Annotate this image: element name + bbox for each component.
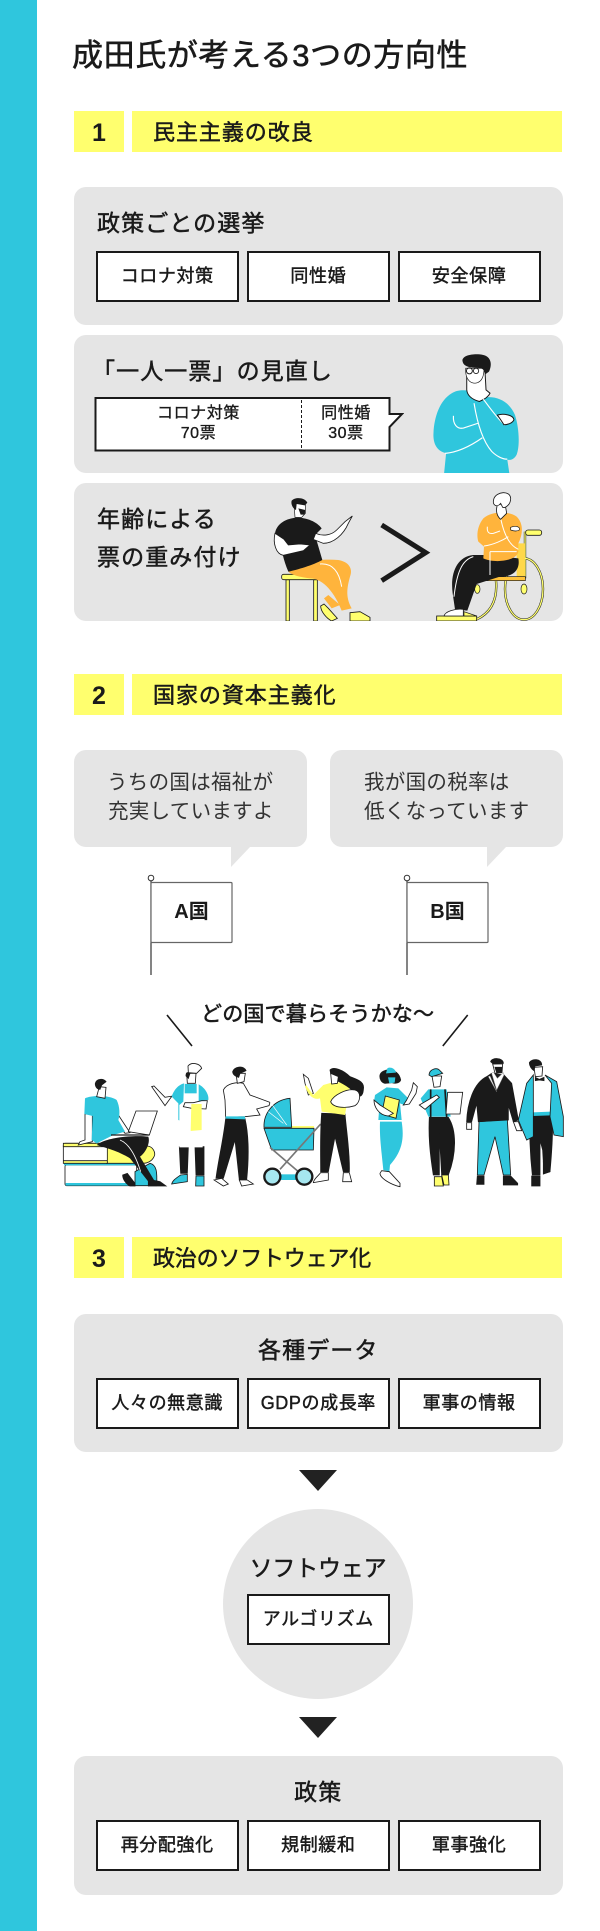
- chip: unconscious of people: [96, 1378, 239, 1429]
- corona votes: [157, 404, 240, 442]
- chip: algorithm: アルゴリズム: [263, 1609, 374, 1629]
- chip: corona: コロナ対策: [121, 266, 214, 286]
- left cyan band: [0, 0, 37, 1931]
- section title 2: [132, 674, 562, 715]
- chip: algorithm: [247, 1594, 390, 1645]
- bubble line 1: うちの国は福祉が: [107, 771, 273, 794]
- panel: age-weighted votes: [74, 483, 562, 621]
- panel: policy: [74, 1756, 562, 1894]
- section number 3: [74, 1237, 124, 1278]
- section title 3: 政治のソフトウェア化: [153, 1246, 371, 1271]
- emphasis lines: [166, 1014, 468, 1046]
- text: 票の重み付け: [97, 544, 242, 570]
- bubble line 2: 充実していますよ: [108, 800, 274, 823]
- corona votes: 70票: [181, 424, 216, 442]
- woman with baby: [303, 1068, 364, 1183]
- text: [97, 506, 242, 570]
- panel: policy-by-policy elections: [74, 187, 562, 325]
- flag label: A国: [174, 901, 209, 923]
- text: 年齢による: [97, 506, 217, 532]
- heading: 各種データ: [258, 1336, 378, 1362]
- chip: same-sex marriage: [247, 251, 390, 302]
- chip: military strengthening: [398, 1820, 541, 1871]
- heading: 政策ごとの選挙: [97, 210, 265, 236]
- chip: redistribution: 再分配強化: [121, 1835, 214, 1855]
- same-sex marriage votes: [321, 404, 371, 442]
- section title 2: 国家の資本主義化: [153, 683, 337, 708]
- bubble tail: [231, 847, 250, 867]
- chip: military strengthening: 軍事強化: [432, 1835, 506, 1855]
- section number 2: [74, 674, 124, 715]
- flag shape: [404, 874, 489, 975]
- chip: deregulation: 規制緩和: [281, 1835, 356, 1855]
- wheelchair: [477, 532, 543, 620]
- section 3 header: [74, 1237, 562, 1278]
- icon: thinking person: [433, 354, 519, 473]
- section number 1: 1: [92, 119, 106, 147]
- man in suit: [467, 1059, 522, 1185]
- chip: corona: [96, 251, 239, 302]
- title: 成田氏が考える3つの方向性: [72, 38, 468, 73]
- panel: various data: [74, 1314, 562, 1452]
- flag A: [148, 874, 233, 975]
- illustration: seated young man, greater-than sign, elderly person in wheelchair: [274, 492, 544, 621]
- flag B: [404, 874, 489, 975]
- bubble body: [330, 750, 562, 847]
- section 2 header: [74, 674, 562, 715]
- panel: one person one vote review: [74, 335, 562, 473]
- flag shape: [148, 874, 233, 975]
- chef: [152, 1064, 208, 1186]
- section number 2: 2: [92, 682, 106, 710]
- box outline with tail and divider: [94, 397, 404, 452]
- bubble tail: [487, 847, 506, 867]
- masked woman with clipboard: [374, 1068, 417, 1187]
- corona votes: コロナ対策: [157, 405, 240, 422]
- section number 3: 3: [92, 1245, 106, 1273]
- chip: unconscious of people: 人々の無意識: [111, 1393, 223, 1413]
- chip: military information: 軍事の情報: [423, 1393, 516, 1413]
- bubble line 2: 低くなっています: [364, 800, 529, 823]
- chip: redistribution: [96, 1820, 239, 1871]
- speech bubble A: [74, 750, 307, 867]
- person on books with laptop: [63, 1079, 166, 1186]
- chip: security: 安全保障: [432, 266, 506, 286]
- vote split box: [94, 397, 404, 452]
- section title 1: [132, 111, 562, 152]
- chip: same-sex marriage: 同性婚: [290, 266, 346, 286]
- man with stroller: [214, 1067, 270, 1186]
- same-sex marriage votes: 同性婚: [321, 405, 371, 422]
- heading: ソフトウェア: [250, 1555, 386, 1581]
- section title 3: [132, 1237, 562, 1278]
- man in coat: [518, 1060, 563, 1186]
- chip: military information: [398, 1378, 541, 1429]
- heading: 政策: [294, 1779, 342, 1805]
- illustration: crowd of people: [62, 1058, 564, 1188]
- chip: security: [398, 251, 541, 302]
- circle: software: [223, 1509, 413, 1699]
- speech bubble B: [330, 750, 563, 867]
- greater-than sign: [382, 525, 426, 581]
- same-sex marriage votes: 30票: [328, 424, 364, 442]
- heading: 「一人一票」の見直し: [92, 358, 333, 384]
- bubble body: [74, 750, 306, 847]
- delivery worker: [419, 1069, 463, 1186]
- section number 1: [74, 111, 124, 152]
- question text: どの国で暮らそうかな～: [201, 1003, 434, 1026]
- stroller: [264, 1098, 321, 1185]
- flag label: B国: [430, 901, 465, 923]
- chip: GDP growth: [247, 1378, 390, 1429]
- arrow down 1: [299, 1470, 337, 1491]
- arrow down 2: [299, 1717, 337, 1738]
- section title 1: 民主主義の改良: [153, 120, 314, 145]
- chip: GDP growth: GDPの成長率: [261, 1393, 376, 1413]
- section 1 header: [74, 111, 562, 152]
- bubble line 1: 我が国の税率は: [364, 771, 510, 794]
- chip: deregulation: [247, 1820, 390, 1871]
- stool: [282, 574, 320, 621]
